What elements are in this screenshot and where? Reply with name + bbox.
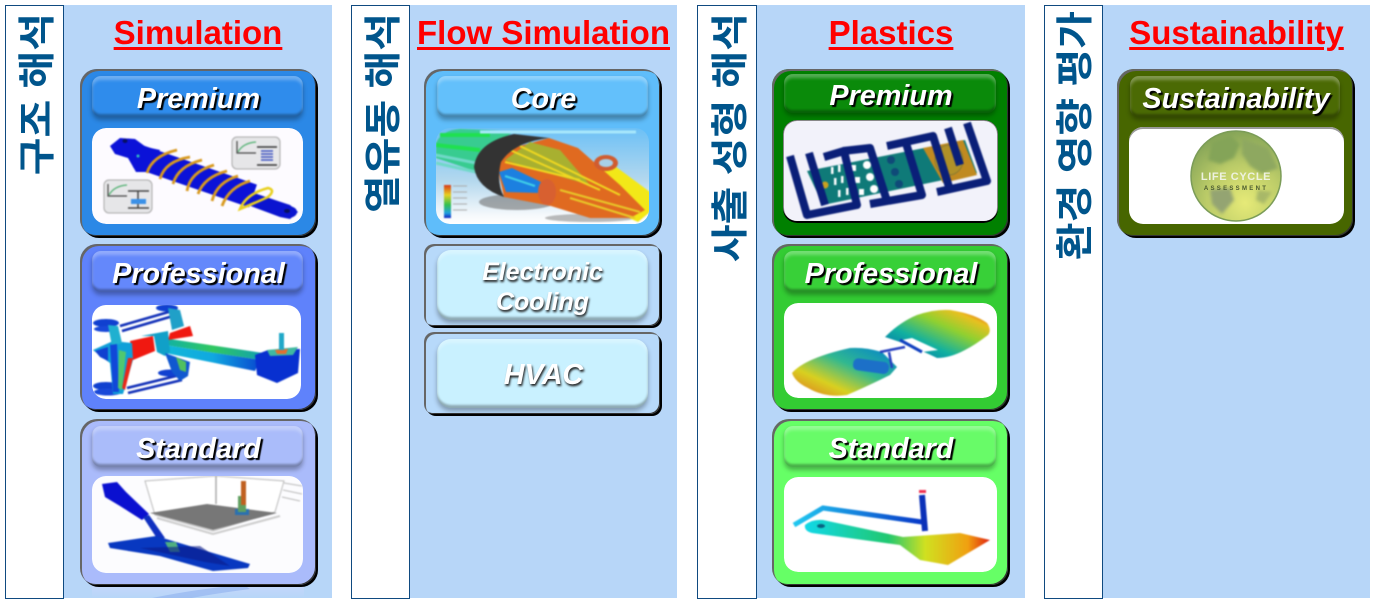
- vertical heading: 환경 영향 평가: 환경 영향 평가: [1054, 11, 1096, 260]
- image: mold cooling layout: [783, 120, 998, 223]
- vertical heading: 구조 해석: 구조 해석: [16, 13, 58, 175]
- button: Sustainability: [1130, 76, 1340, 117]
- label: ASSESSMENT: ASSESSMENT: [1204, 186, 1268, 192]
- button: Premium: [784, 74, 996, 113]
- background panel: [1103, 5, 1370, 598]
- button: HVAC: [437, 339, 648, 408]
- heading: Simulation: Simulation: [114, 14, 282, 51]
- card: Simulation Standard: [80, 419, 316, 585]
- heading: Flow Simulation: Flow Simulation: [417, 14, 670, 51]
- background panel: [757, 5, 1025, 598]
- button: Premium: Premium: [829, 80, 953, 112]
- button: Professional: [92, 251, 303, 292]
- heading: Sustainability: Sustainability: [1129, 14, 1344, 51]
- column: Simulation: [5, 5, 332, 599]
- side label panel: structural analysis: [5, 5, 64, 599]
- label: LIFE CYCLE: LIFE CYCLE: [1201, 171, 1271, 183]
- column: Flow Simulation: [351, 5, 677, 599]
- image: shock absorber: [92, 128, 303, 224]
- card: Simulation Professional: [80, 244, 316, 410]
- background panel: [64, 5, 332, 598]
- card: Plastics Professional: [772, 244, 1008, 410]
- button: Standard: [92, 426, 303, 467]
- column: Plastics: [697, 5, 1025, 599]
- card: Simulation Premium: [80, 69, 316, 236]
- button: Electronic Cooling: Cooling: [496, 288, 589, 316]
- button: HVAC: HVAC: [504, 359, 583, 391]
- reflection below card: [92, 586, 304, 598]
- card: Plastics Premium: [772, 69, 1008, 236]
- button: Professional: Professional: [805, 258, 977, 290]
- card: Flow Core: [424, 69, 660, 236]
- card: Plastics Standard: [772, 419, 1008, 585]
- side label panel: environmental impact assessment: [1044, 5, 1103, 599]
- image: life cycle assessment globe: [1129, 127, 1344, 224]
- button: Electronic Cooling: Electronic: [482, 258, 603, 286]
- button: Core: Core: [511, 83, 576, 115]
- button: Standard: [784, 426, 996, 467]
- side label panel: injection molding analysis: [697, 5, 757, 599]
- button: Premium: Premium: [137, 83, 260, 115]
- button: Professional: Professional: [112, 258, 285, 290]
- image: airflow over body: [436, 128, 649, 224]
- button: Electronic Cooling: [437, 250, 648, 320]
- button: Standard: Standard: [829, 433, 953, 465]
- image: pedal analysis with 3D chart: [92, 476, 303, 573]
- card: Sustainability: [1117, 69, 1353, 236]
- button: Core: [437, 76, 648, 117]
- image: runner and part fill: [784, 477, 997, 572]
- background panel: [410, 5, 677, 598]
- button: Premium: [92, 76, 303, 117]
- image: twin bowl mold fill: [784, 303, 997, 398]
- button: Standard: Standard: [136, 433, 261, 465]
- column: Sustainability: [1044, 5, 1370, 599]
- image: stress analysis of arm: [92, 305, 301, 399]
- heading: Plastics: Plastics: [829, 14, 953, 51]
- button: Professional: [784, 251, 996, 292]
- icon: globe: [1190, 130, 1282, 222]
- card: Electronic Cooling: [424, 244, 660, 326]
- vertical heading: 사출 성형 해석: 사출 성형 해석: [709, 13, 751, 262]
- card: HVAC: [424, 332, 660, 414]
- button: Sustainability: Sustainability: [1142, 83, 1330, 115]
- side label panel: thermal fluid analysis: [351, 5, 410, 599]
- vertical heading: 열유동 해석: 열유동 해석: [362, 13, 404, 213]
